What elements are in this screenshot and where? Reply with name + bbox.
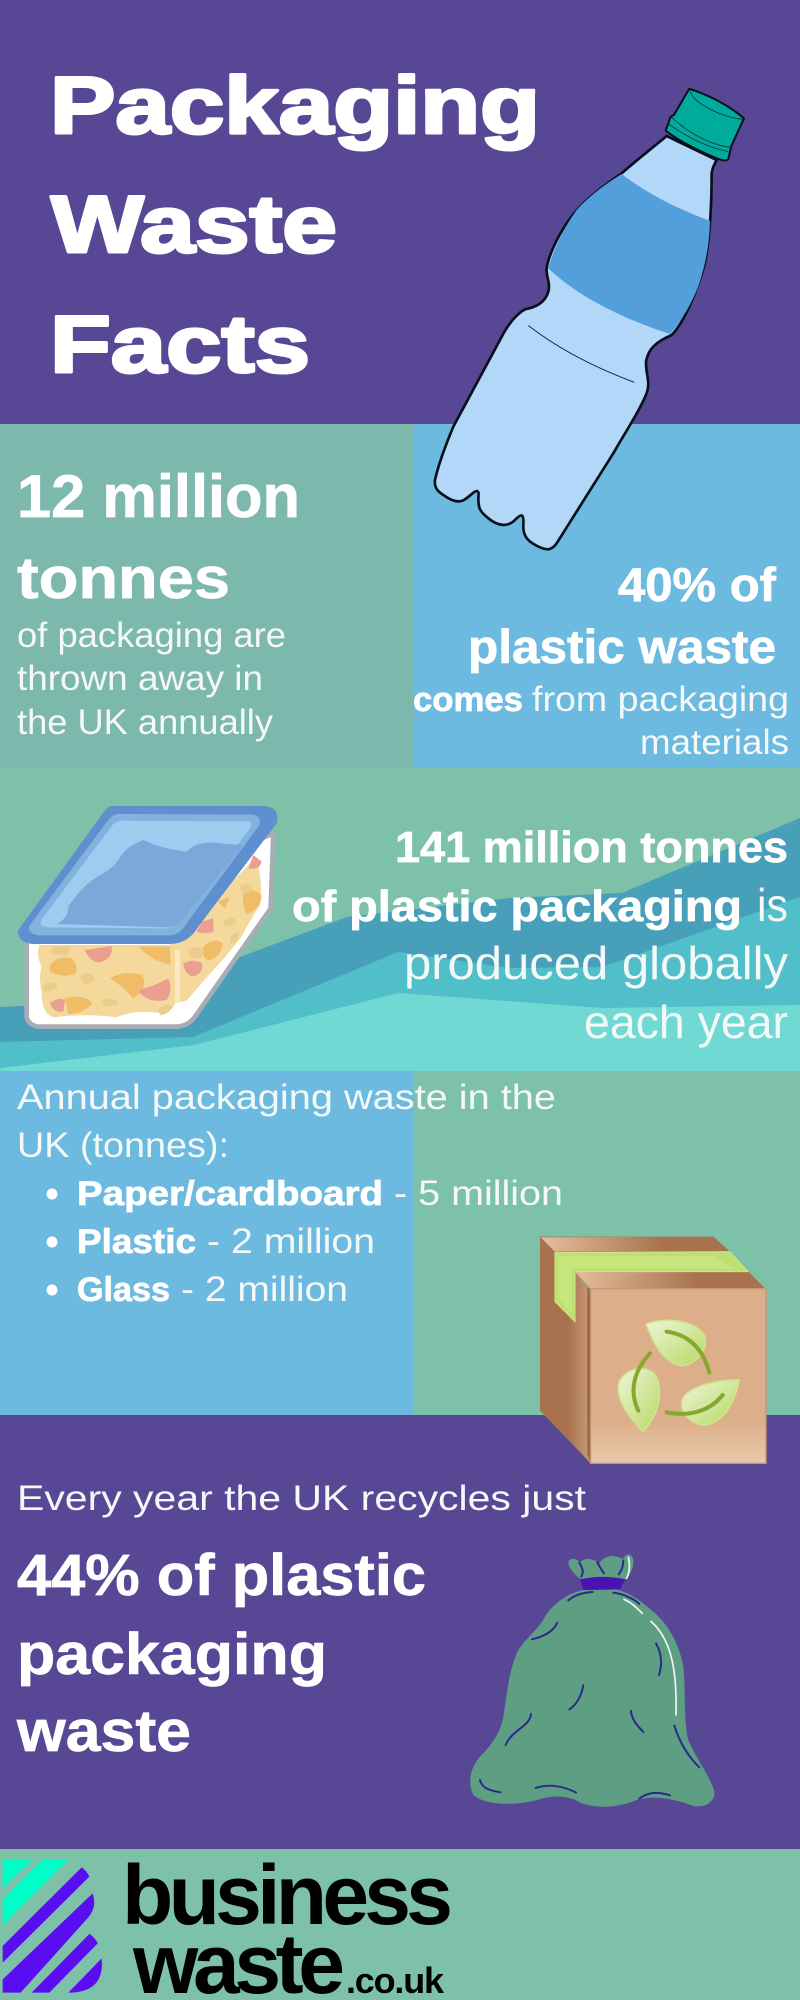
panel: annual waste green background <box>414 1071 800 1415</box>
text block: 141 million tonnes: 141 million tonnes <box>395 823 788 872</box>
text block: 12 million tonnes: the UK annually <box>17 703 274 742</box>
logo wordmark: .co.uk <box>346 1960 445 2000</box>
panel: header background <box>0 0 800 424</box>
panel: footer background <box>0 1849 800 2000</box>
title <box>50 61 540 390</box>
text block: 40 percent of plastic waste: from packaging <box>532 680 789 719</box>
logo wordmark: business <box>122 1848 453 1942</box>
text block: annual packaging waste: UK (tonnes): <box>17 1126 229 1165</box>
panel: annual waste blue background <box>0 1071 414 1415</box>
text block: 12 million tonnes <box>17 463 300 742</box>
icon: food container <box>18 806 277 1027</box>
logo wordmark <box>122 1848 453 2000</box>
text block: recycling statistic: waste <box>16 1699 191 1764</box>
title: Waste <box>51 180 337 270</box>
text block: 141 million tonnes <box>292 823 788 1048</box>
text block: 40 percent of plastic waste: 40% of <box>618 558 776 611</box>
panel: recycling background <box>0 1415 800 1849</box>
text block: 40 percent of plastic waste <box>413 558 789 762</box>
text block: 141 million tonnes: of plastic packaging <box>292 882 742 931</box>
text block: annual packaging waste: Annual packaging waste in the <box>17 1078 556 1117</box>
panel: 12 million tonnes background <box>0 424 414 768</box>
text block: annual packaging waste: Plastic <box>77 1223 196 1261</box>
text block: annual packaging waste: Paper/cardboard <box>77 1175 383 1213</box>
text block: recycling statistic: 44% of plastic <box>17 1543 426 1608</box>
text block: 12 million tonnes: 12 million <box>17 463 300 530</box>
text block: 12 million tonnes: thrown away in <box>17 659 263 698</box>
text block: 141 million tonnes: each year <box>584 996 788 1048</box>
text block: annual packaging waste: - 2 million <box>207 1222 375 1261</box>
icon: logo stripes <box>3 1860 102 1993</box>
text block: annual packaging waste: - 5 million <box>394 1174 563 1213</box>
text block: 40 percent of plastic waste: plastic waste <box>468 620 776 673</box>
text block: recycling statistic: Every year the UK recycles just <box>17 1479 586 1518</box>
text block: recycling statistic: packaging <box>17 1622 327 1687</box>
text block: 141 million tonnes: is <box>757 879 788 931</box>
text block: 12 million tonnes: tonnes <box>17 546 230 611</box>
title: Facts <box>50 300 310 390</box>
icon: cardboard box with recycling leaves <box>540 1237 766 1463</box>
text block: annual packaging waste: - 2 million <box>181 1270 348 1309</box>
logo: business waste <box>3 1848 453 2000</box>
text block: annual packaging waste <box>17 1078 563 1309</box>
text block: annual packaging waste: Glass <box>77 1271 170 1309</box>
text block: 141 million tonnes: produced globally <box>404 937 788 989</box>
text block: 12 million tonnes: of packaging are <box>17 616 286 655</box>
title: Packaging <box>50 61 540 151</box>
text block: recycling statistic <box>16 1479 586 1764</box>
icon: rubbish bag <box>470 1555 714 1807</box>
panel: 141 million tonnes background with waves <box>0 768 800 1071</box>
icon: plastic bottle <box>435 89 744 549</box>
text block: 40 percent of plastic waste: comes <box>413 681 523 719</box>
text block: 40 percent of plastic waste: materials <box>640 723 789 762</box>
panel: 40 percent background <box>414 424 800 768</box>
